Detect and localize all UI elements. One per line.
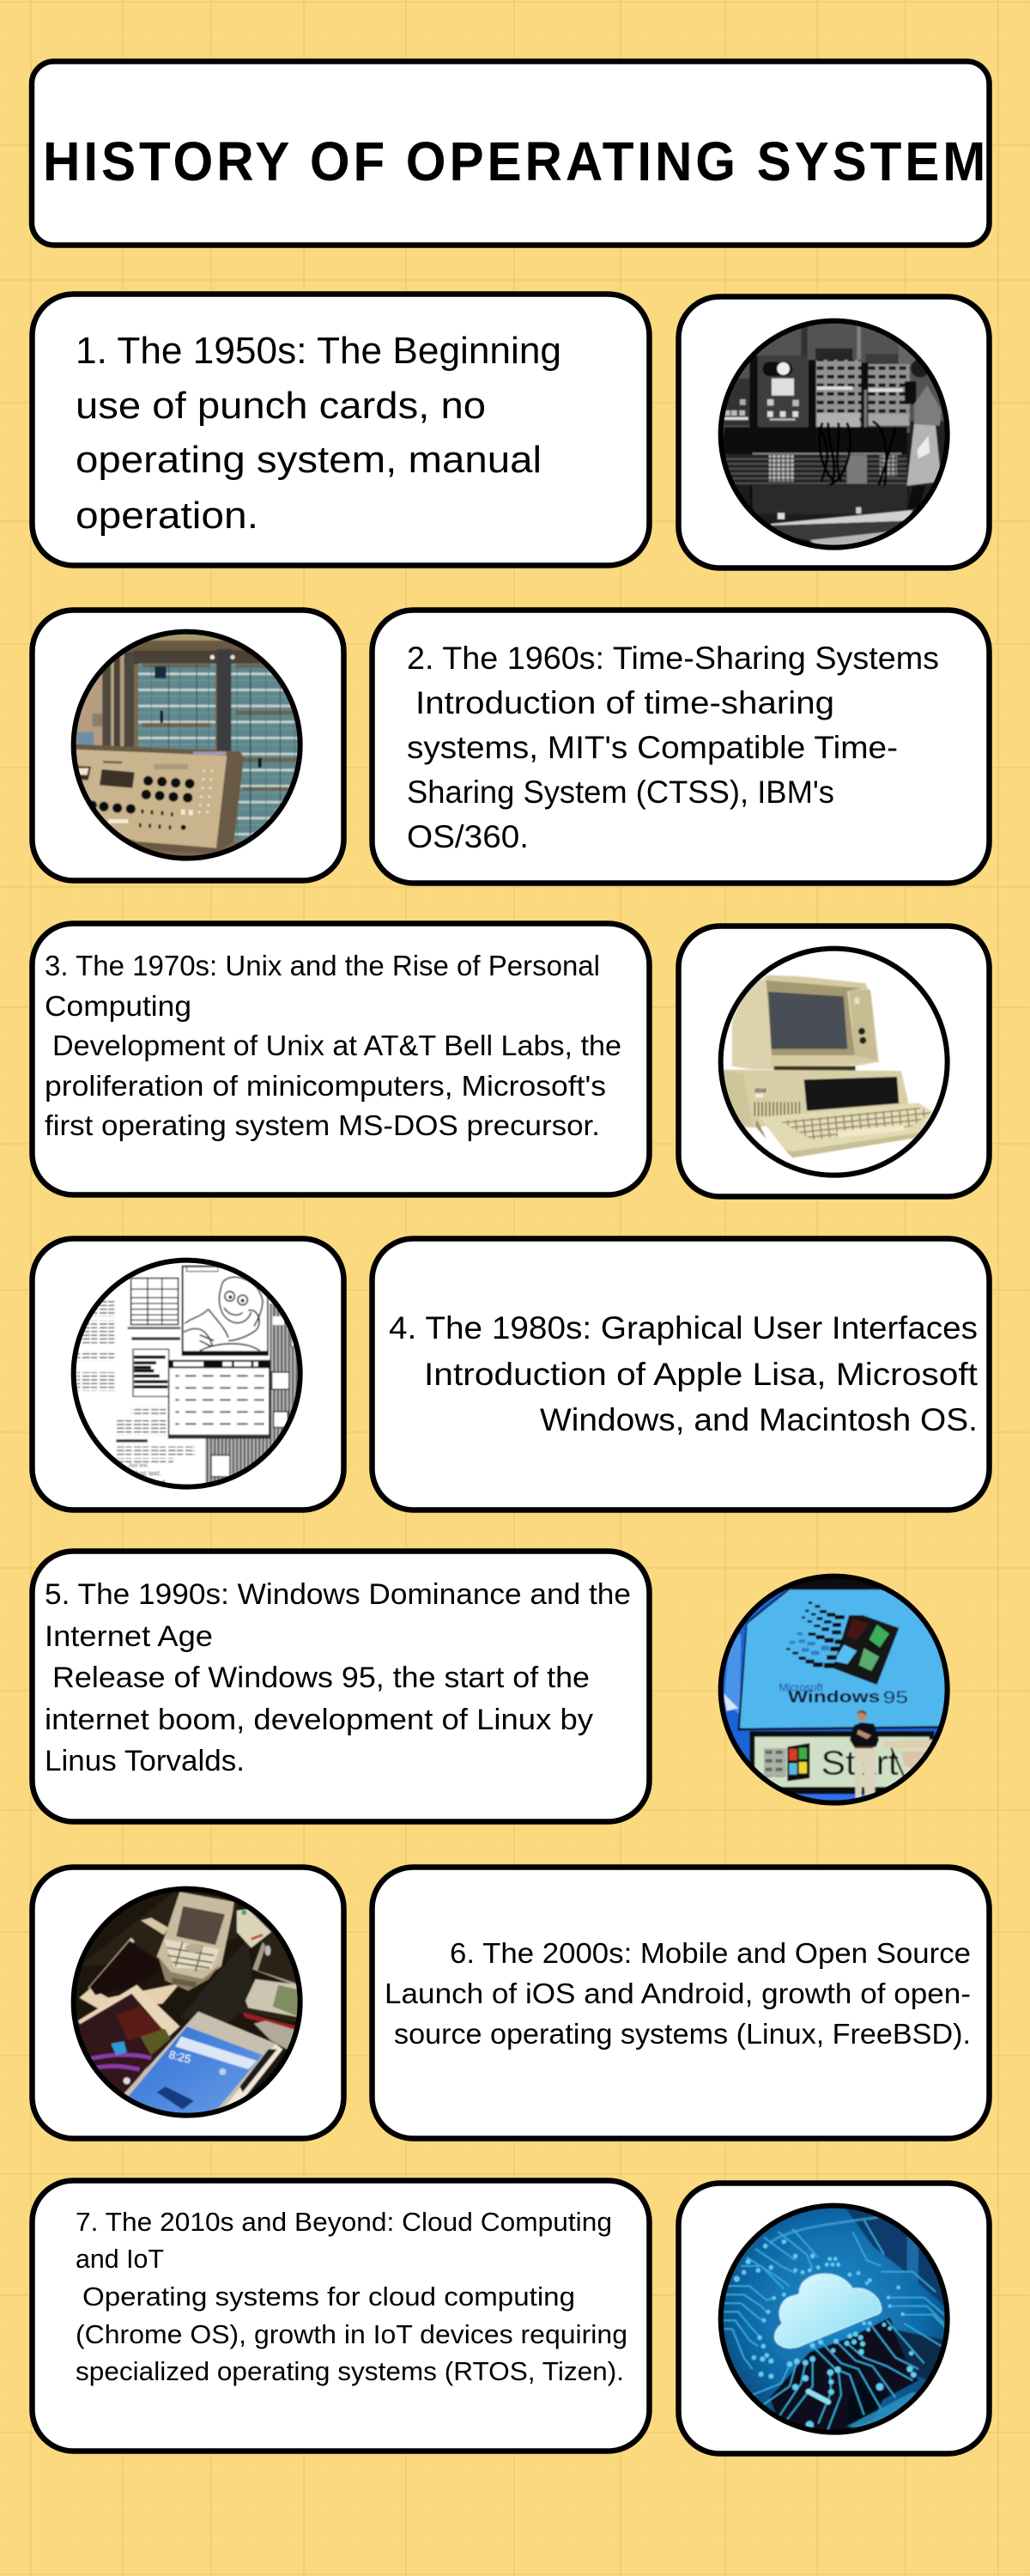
panel: 1950s text	[33, 294, 649, 565]
panel: 1960s text	[373, 610, 989, 883]
panel: 1980s text	[373, 1238, 989, 1510]
panel: 1950s photo card	[678, 297, 989, 568]
icon: Apple Lisa desktop screenshot: Just text.	[131, 1479, 167, 1489]
panel: 1970s text: Development of Unix at AT&T Bell Labs, the	[52, 1030, 621, 1061]
panel: 1990s text	[33, 1551, 649, 1822]
panel: 1980s text: Windows, and Macintosh OS.	[540, 1401, 978, 1437]
icon: Windows 95 launch photo: 95	[883, 1687, 908, 1707]
panel: 2000s text: 6. The 2000s: Mobile and Open Source	[450, 1938, 971, 1970]
panel: 1950s text: 1. The 1950s: The Beginning	[76, 330, 561, 372]
panel: 1970s text: proliferation of minicomputers, Microsoft's	[45, 1070, 606, 1102]
panel: 1960s text: 2. The 1960s: Time-Sharing Systems	[407, 641, 939, 676]
panel: 2000s text: Launch of iOS and Android, growth of open-	[385, 1978, 971, 2010]
panel: 2010s text	[33, 2181, 649, 2451]
panel: 2010s text: specialized operating systems (RTOS, Tizen).	[76, 2356, 624, 2386]
icon: pile of mobile phones photo	[65, 1880, 310, 2125]
icon: Windows 95 launch photo: Microsoft	[779, 1681, 823, 1693]
panel: 1980s text: 4. The 1980s: Graphical User Interfaces	[389, 1309, 978, 1346]
panel: 1970s photo card	[678, 926, 989, 1197]
panel: 1960s text: OS/360.	[407, 819, 529, 854]
icon: IBM PC photo: IBM	[754, 1087, 766, 1095]
panel: 2000s text	[373, 1867, 989, 2138]
icon: IBM PC photo	[712, 940, 957, 1185]
panel: 1960s photo card	[33, 610, 343, 881]
panel: 1970s text: Computing	[45, 990, 191, 1022]
panel: 1990s text: 5. The 1990s: Windows Dominance and the	[45, 1578, 631, 1611]
panel: 1990s text: Release of Windows 95, the start of the	[52, 1662, 590, 1694]
icon: Apple Lisa desktop screenshot	[65, 1252, 310, 1497]
panel: 1960s text: Sharing System (CTSS), IBM's	[407, 775, 834, 810]
panel: 2010s text: (Chrome OS), growth in IoT devices requiring	[76, 2319, 627, 2349]
panel: 1960s text: Introduction of time-sharing	[415, 685, 834, 720]
panel: 2010s photo card	[678, 2183, 989, 2454]
panel: 2010s text: Operating systems for cloud computing	[82, 2281, 575, 2312]
panel: 1990s text: Linus Torvalds.	[45, 1745, 245, 1777]
icon: Apple Lisa desktop screenshot: Just text.	[134, 1470, 161, 1478]
icon: cloud on circuit board	[712, 2197, 957, 2442]
panel: 1980s photo card	[33, 1238, 343, 1510]
icon: ENIAC computer room photo	[712, 313, 957, 557]
panel: 1950s text: operation.	[76, 495, 258, 537]
panel: 2010s text: 7. The 2010s and Beyond: Cloud Computing	[76, 2207, 612, 2237]
panel: 1970s text: first operating system MS-DOS precursor.	[45, 1109, 600, 1141]
icon: Windows 95 launch photo	[712, 1568, 957, 1813]
icon: Windows 95 launch photo: Windows	[788, 1689, 880, 1707]
icon: mainframe console photo	[65, 623, 310, 868]
panel: 1970s text: 3. The 1970s: Unix and the Rise of Personal	[45, 950, 600, 981]
icon: Apple Lisa desktop screenshot: Just text.	[128, 1464, 149, 1469]
panel: 1990s text: internet boom, development of Linux by	[45, 1704, 593, 1736]
panel: 1980s text: Introduction of Apple Lisa, Microsoft	[424, 1356, 978, 1392]
title panel	[32, 62, 989, 246]
panel: 2000s text: source operating systems (Linux, FreeBSD).	[394, 2019, 971, 2050]
panel: 1950s text: use of punch cards, no	[76, 385, 486, 427]
panel: 1960s text: systems, MIT's Compatible Time-	[407, 730, 898, 765]
panel: 2000s photo card	[33, 1867, 343, 2138]
panel: 1990s text: Internet Age	[45, 1620, 213, 1653]
icon: pile of mobile phones photo: 8:25	[167, 2048, 192, 2066]
panel: 1950s text: operating system, manual	[76, 439, 542, 481]
panel: 2010s text: and IoT	[76, 2244, 164, 2274]
title: HISTORY OF OPERATING SYSTEM	[43, 131, 989, 192]
panel: 1970s text	[33, 924, 649, 1195]
icon: Windows 95 launch photo: Start	[821, 1745, 899, 1783]
